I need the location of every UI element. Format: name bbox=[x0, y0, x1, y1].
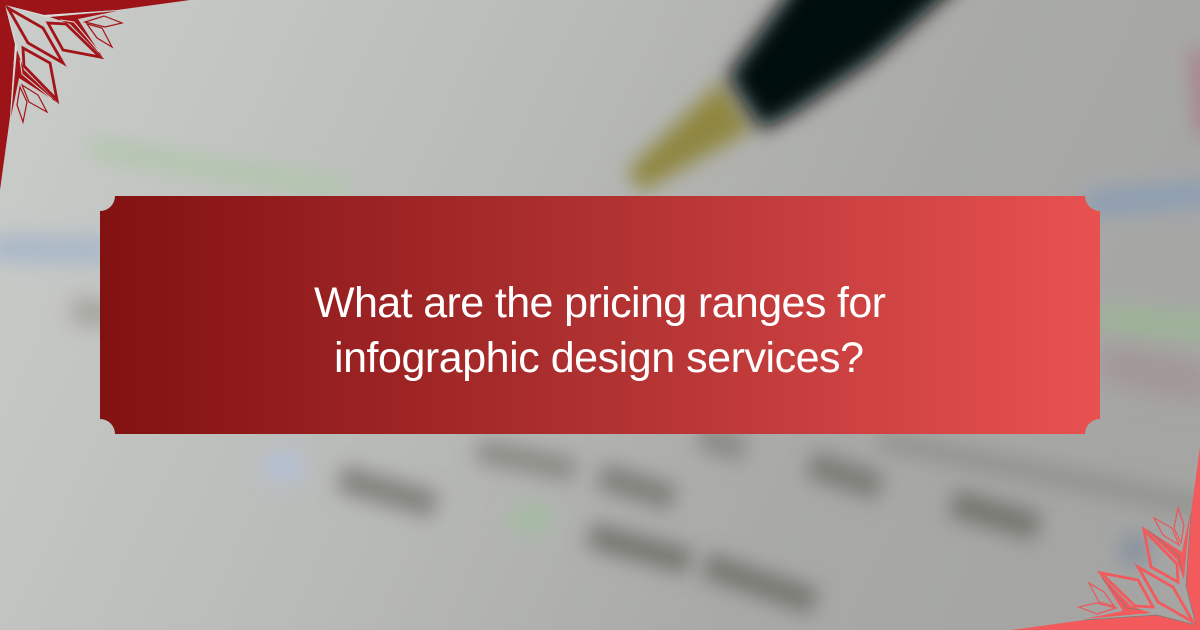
title text bbox=[314, 279, 886, 382]
blurred chart lines bbox=[90, 148, 350, 190]
title text: What are the pricing ranges for bbox=[314, 279, 886, 327]
title text: infographic design services? bbox=[334, 334, 864, 382]
blurred legend and labels bbox=[264, 451, 304, 481]
corner ornament: top left bbox=[0, 0, 190, 190]
banner panel with notched corners bbox=[100, 196, 1100, 434]
pen nib bbox=[628, 80, 752, 192]
corner ornament: bottom right bbox=[1011, 440, 1200, 630]
pen barrel bbox=[728, 0, 975, 130]
title banner bbox=[100, 196, 1100, 434]
